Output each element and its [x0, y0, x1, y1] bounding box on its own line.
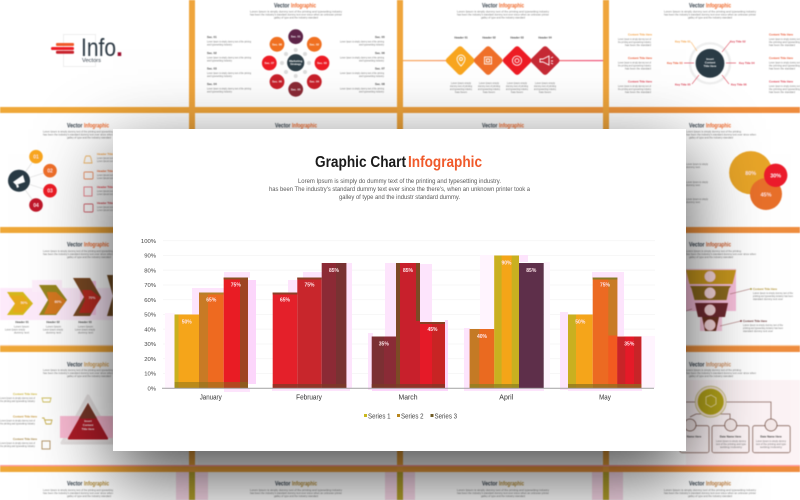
thumbnail: triangle: Lorem Ipsum is simply dummy text of	[0, 397, 35, 400]
thumbnail: diamonds: Vector	[482, 4, 498, 10]
title	[315, 154, 482, 171]
thumbnail: numbered circles: Lorem Ipsum text	[97, 206, 113, 209]
thumbnail: chevron arrows: Lorem Ipsum simply	[43, 328, 64, 332]
thumbnail: chevron arrows: Lorem Ipsum	[46, 326, 61, 328]
January bars: 75%	[231, 282, 241, 288]
thumbnail: hub diagram: the printing and typesetting industry	[618, 88, 652, 91]
thumbnail: org chart: setting industry	[760, 446, 783, 449]
month labels: March	[398, 394, 418, 402]
thumbnail: hub diagram: has been the standard	[625, 44, 652, 47]
thumbnail: diamonds: has been	[455, 91, 468, 94]
thumbnail: org chart: text of the printing and type	[756, 443, 787, 446]
thumbnail: diamonds: Header 02	[482, 36, 496, 40]
thumbnail: circular diagram: Lorem Ipsum is simply dummy text of the printing	[340, 56, 385, 60]
thumbnail: hub diagram: Vector	[689, 4, 705, 10]
thumbnail: numbered circles: Vector	[67, 124, 83, 130]
thumbnail: circular diagram: Sec. 01	[291, 35, 301, 39]
month labels: April	[499, 394, 514, 402]
title: Graphic Chart	[315, 154, 406, 171]
thumbnail: circular diagram: Lorem Ipsum is simply dummy text of the printing	[207, 40, 252, 44]
thumbnail: hub diagram: Infographic	[706, 4, 732, 10]
thumbnail: circular diagram: Sec. 03	[207, 66, 217, 70]
thumbnail: numbered circles: galley of type and the industry standard	[67, 136, 112, 140]
thumbnail: hub diagram: Lorem Ipsum is simply dummy text of	[618, 38, 651, 41]
thumbnail: circular diagram: Sec. 04	[309, 80, 320, 84]
thumbnail headings: other rows: galley of type and the industry standard	[688, 495, 733, 498]
thumbnail: numbered circles: 03	[47, 188, 53, 194]
thumbnail: diamonds: Lorem Ipsum is simply dummy text of the printing and typesetting industry	[457, 10, 550, 14]
thumbnail: chevron arrows: 50%	[20, 301, 28, 305]
title: Infographic	[408, 154, 482, 171]
thumbnail headings: other rows	[43, 124, 757, 498]
thumbnail: org chart: Vector	[689, 362, 705, 368]
subtitle paragraph	[269, 178, 530, 201]
thumbnail: funnel: standard dummy text ever	[753, 298, 783, 301]
thumbnail: funnel: Infographic	[706, 242, 732, 248]
thumbnail: logo: Info	[81, 34, 116, 62]
thumbnail: hub diagram	[618, 4, 800, 94]
thumbnail: numbered circles: has been the industry's standard dummy text ever since when	[43, 134, 114, 136]
thumbnail: diamonds: galley of type and the industry standard	[481, 16, 526, 20]
subtitle paragraph: Lorem Ipsum is simply do dummy text of the printing and typesetting industry.	[298, 178, 501, 185]
thumbnail: hub diagram: Content Title Here	[769, 56, 793, 60]
thumbnail: triangle: Insert	[84, 419, 92, 423]
thumbnail: hub diagram: has been the standard	[769, 44, 796, 47]
thumbnail: numbered circles: Lorem Ipsum text	[97, 177, 113, 180]
thumbnail: logo: Vectors	[82, 58, 102, 64]
thumbnail: circular diagram: Lorem Ipsum is simply dummy text of the printing	[340, 40, 385, 44]
thumbnail: venn circles: dummy text	[686, 184, 700, 187]
thumbnail: diamonds	[403, 4, 603, 94]
thumbnail: diamonds: and typesetting industry	[478, 88, 501, 91]
thumbnail: venn circles: dummy text	[686, 201, 700, 204]
thumbnail: funnel: Content Title Here	[743, 319, 767, 323]
thumbnail: circular diagram: Sec. 06	[272, 80, 282, 84]
thumbnail: org chart: Lorem Ipsum is simply dummy	[716, 440, 747, 443]
thumbnail: diamonds: has been the industry's standard dummy text ever since when an unknown printer	[457, 14, 549, 16]
thumbnail: circular diagram: Lorem Ipsum is simply dummy text of the printing	[340, 72, 385, 75]
thumbnail: chevron arrows	[0, 242, 114, 334]
thumbnail: triangle: galley of type and the industry standard	[67, 375, 112, 378]
thumbnail: hub diagram: Key Title 01	[675, 40, 691, 44]
thumbnail: hub diagram: the printing and typesetting	[769, 64, 800, 68]
panel: main white card	[113, 129, 686, 451]
thumbnail: diamonds: and typesetting industry	[534, 88, 557, 91]
thumbnail: diamonds: Lorem Ipsum simply	[507, 82, 528, 85]
May bars	[568, 278, 641, 388]
month labels: January	[200, 394, 222, 402]
thumbnail: diamonds: Infographic	[499, 4, 525, 10]
thumbnail: funnel: Lorem Ipsum is simply dummy text of the	[743, 324, 784, 327]
thumbnail: diamonds: has been	[511, 91, 524, 94]
thumbnail: triangle: Title Here	[82, 427, 95, 431]
thumbnail: hub diagram: Key Title 04	[739, 61, 755, 65]
March bars: 35%	[379, 342, 389, 348]
thumbnail headings: other rows: Vector	[275, 124, 291, 130]
thumbnail: circular diagram: Sec. 08	[272, 42, 282, 46]
thumbnail: venn circles: Lorem Ipsum is simply	[686, 198, 709, 201]
pink halos beside bottom bands	[176, 472, 623, 500]
April bars: 85%	[526, 268, 537, 274]
thumbnail: circular diagram: Lorem Ipsum is simply dummy text of the printing	[207, 56, 252, 60]
legend: Series 2	[401, 414, 424, 420]
bar chart	[141, 239, 655, 402]
thumbnail: diamonds: has been	[539, 91, 552, 94]
y axis labels: 40%	[144, 328, 157, 334]
thumbnail: diamonds: dummy text of printing	[478, 85, 501, 88]
thumbnail: hub diagram: Insert	[706, 57, 714, 61]
thumbnail headings: other rows: Vector	[275, 482, 291, 488]
thumbnail: funnel: galley of type and the industry standard	[689, 256, 734, 259]
y axis labels: 60%	[144, 298, 157, 304]
thumbnail: circular diagram: Marketing	[289, 59, 303, 63]
April bars: 90%	[501, 260, 512, 266]
thumbnail: org chart: has been the industry's standard dummy text ever since when	[686, 372, 757, 375]
May bars: 50%	[575, 320, 586, 326]
thumbnail: circular diagram: galley of type and the industry standard	[274, 16, 319, 20]
thumbnail: chevron arrows: dummy text	[78, 332, 93, 334]
February bars: 65%	[280, 298, 291, 304]
thumbnail: hub diagram: the printing and typesetting	[769, 41, 800, 44]
y axis labels: 0%	[147, 386, 157, 392]
thumbnail: venn circles: galley of type and the industry standard	[689, 136, 734, 140]
thumbnail: chevron arrows: has been the industry's standard dummy text ever since when	[43, 253, 114, 256]
thumbnail: numbered circles: Lorem Ipsum is simply dummy text of the printing and typesetting	[43, 130, 114, 134]
thumbnail: hub diagram: has been the standard	[769, 68, 796, 70]
thumbnail: numbered circles: Header Title	[97, 185, 113, 189]
thumbnail: numbered circles	[8, 124, 114, 212]
thumbnail: hub diagram: Content	[705, 60, 715, 64]
thumbnail: circular diagram: Sec. 08	[375, 82, 385, 86]
thumbnail: chevron arrows: dummy text	[14, 332, 29, 334]
subtitle paragraph: galley of type and the industr standard dummy.	[339, 194, 460, 201]
thumbnail: numbered circles: Infographic	[84, 124, 110, 130]
thumbnail: numbered circles: Lorem Ipsum text	[97, 190, 113, 193]
thumbnail: venn circles: 45%	[760, 192, 772, 198]
thumbnail: triangle: has been the industry's standard dummy text ever since when	[43, 372, 114, 375]
thumbnail: chevron arrows: Lorem Ipsum is simply dummy text of the printing and typesetting	[43, 250, 114, 253]
thumbnail: hub diagram: Title Here	[704, 64, 717, 68]
thumbnail: numbered circles: Lorem Ipsum text	[97, 209, 113, 212]
thumbnail: hub diagram: Content Title Here	[628, 32, 652, 36]
thumbnail: hub diagram: the printing and typesetting	[769, 88, 800, 91]
thumbnail: numbered circles: 04	[33, 203, 39, 209]
January bars: 50%	[182, 320, 192, 326]
y axis labels: 80%	[144, 268, 157, 274]
thumbnail: circular diagram: and typesetting industry	[359, 44, 385, 46]
thumbnail: triangle: Lorem Ipsum is simply dummy text of	[0, 420, 35, 422]
thumbnail: chevron arrows: Header 03	[78, 320, 92, 324]
thumbnail headings: other rows: galley of type and the industry standard	[274, 495, 319, 498]
month labels: May	[599, 394, 611, 402]
y axis labels: 30%	[144, 342, 157, 348]
thumbnail headings: other rows: Lorem Ipsum is simply dummy text of the printing and typesetting industry	[250, 489, 343, 492]
thumbnail: circular diagram: and typesetting industry	[207, 44, 233, 46]
thumbnail: hub diagram: the printing and typesetting industry	[618, 41, 652, 44]
thumbnail: venn circles: 30%	[770, 174, 781, 180]
thumbnail: numbered circles: Header Title	[97, 201, 113, 205]
thumbnail headings: other rows: Infographic	[706, 482, 732, 488]
thumbnail: chevron arrows: 60%	[54, 300, 62, 304]
grid bands between thumbnails	[0, 107, 800, 472]
thumbnail headings: other rows: Infographic	[292, 124, 318, 130]
thumbnail: venn circles: dummy text	[686, 166, 700, 169]
thumbnail: hub diagram: Key Title 05	[675, 82, 691, 86]
y axis labels	[141, 239, 157, 392]
thumbnail: diamonds: Lorem Ipsum simply	[451, 82, 472, 85]
thumbnail: triangle: Vector	[67, 362, 83, 368]
January bars	[174, 278, 248, 388]
thumbnail: hub diagram: Content Title Here	[769, 80, 793, 84]
thumbnail: chevron arrows: Lorem Ipsum simply	[75, 328, 96, 332]
February bars	[273, 263, 346, 388]
thumbnail: hub diagram: has been the standard	[769, 91, 796, 94]
thumbnail: numbered circles: Header Title	[97, 169, 113, 173]
March bars	[372, 263, 445, 388]
thumbnail: venn circles: 80%	[745, 171, 756, 177]
y axis labels: 20%	[144, 357, 157, 363]
thumbnail: hub diagram: Lorem Ipsum is simply dummy text of	[618, 62, 651, 64]
thumbnail: hub diagram: Content Title Here	[628, 56, 652, 60]
thumbnail headings: other rows: Lorem Ipsum is simply dummy text of the printing and typesetting industry	[457, 489, 550, 492]
thumbnail: numbered circles: Header Title	[97, 152, 113, 156]
thumbnail headings: other rows: Vector	[689, 482, 705, 488]
thumbnail: venn circles: has been the industry's standard dummy text ever since when	[686, 134, 757, 136]
thumbnail: triangle: Infographic	[84, 362, 110, 368]
thumbnail: circular diagram: Lorem Ipsum is simply dummy text of the printing	[207, 72, 252, 75]
thumbnail: diamonds: dummy text of printing	[534, 85, 557, 88]
thumbnail: chevron arrows: Lorem Ipsum simply	[5, 328, 26, 332]
thumbnail: hub diagram: Content Title Here	[628, 80, 652, 84]
thumbnail: triangle: the printing and typesetting industry	[0, 400, 36, 403]
thumbnail: funnel: printing and typesetting industry has been	[753, 295, 794, 298]
thumbnail: triangle: Content Title Here	[13, 392, 37, 396]
legend: Series 1	[368, 414, 391, 420]
thumbnail: numbered circles: 02	[47, 168, 53, 174]
subtitle paragraph: has been The industry's standard dummy text ever since the there's, when an unknown printer took a	[269, 186, 530, 193]
thumbnail: circular diagram: and typesetting industry	[359, 90, 385, 94]
thumbnail: numbered circles: Lorem Ipsum text	[97, 193, 113, 196]
thumbnail headings: other rows: Lorem Ipsum is simply dummy text of the printing and typesetting	[43, 489, 114, 492]
thumbnail: org chart: Date Name Here	[720, 434, 742, 438]
y axis labels: 50%	[144, 313, 157, 319]
thumbnail: org chart: Infographic	[706, 362, 732, 368]
thumbnail headings: other rows: has been the industry's standard dummy text ever since when	[43, 492, 114, 495]
thumbnail: circular diagram: Sec. 04	[207, 82, 217, 86]
thumbnail: diamonds: and typesetting industry	[506, 88, 529, 91]
thumbnail: diamonds: dummy text of printing	[506, 85, 529, 88]
thumbnail: logo: .	[116, 34, 123, 62]
thumbnail: funnel: has been the industry's standard dummy text ever since when	[686, 253, 757, 256]
thumbnail: org chart	[680, 362, 800, 465]
thumbnail headings: other rows: Vector	[67, 482, 83, 488]
thumbnail: hub diagram: Content Title Here	[769, 32, 793, 36]
y axis labels: 70%	[144, 283, 157, 289]
thumbnail: hub diagram: galley of type and the industry standard	[688, 16, 733, 20]
thumbnail headings: other rows: has been the industry's standard dummy text ever since when an unknown printer	[250, 492, 342, 495]
thumbnail: circular diagram: and typesetting industry	[207, 75, 233, 78]
thumbnail: circular diagram: Sec. 01	[207, 35, 217, 39]
y axis labels: 90%	[144, 254, 157, 260]
thumbnail: triangle	[0, 362, 114, 449]
thumbnail: chevron arrows: Infographic	[84, 242, 110, 248]
month labels: February	[296, 394, 322, 402]
thumbnail: numbered circles: 01	[33, 154, 39, 160]
thumbnail: hub diagram: Key Title 03	[667, 61, 683, 65]
thumbnail: chevron arrows: galley of type and the industry standard	[67, 256, 112, 259]
thumbnail: triangle: Content	[83, 423, 93, 427]
thumbnail: venn circles: Lorem Ipsum is simply	[686, 181, 709, 184]
thumbnail: org chart: setting industry	[720, 446, 743, 449]
April bars	[470, 256, 544, 388]
thumbnail: chevron arrows: 70%	[88, 296, 96, 300]
thumbnail: triangle: Content Title Here	[13, 414, 37, 418]
May bars: 75%	[600, 282, 611, 288]
thumbnail headings: other rows: has been the industry's standard dummy text ever since when an unknown printer	[664, 492, 756, 495]
March bars: 45%	[427, 327, 438, 333]
thumbnail: circular diagram: Sec. 02	[309, 42, 320, 46]
thumbnail: triangle: the printing and typesetting industry	[0, 422, 36, 426]
thumbnail: chevron arrows: Header 02	[46, 320, 60, 324]
February bars: 75%	[304, 282, 315, 288]
thumbnail: triangle: Lorem Ipsum is simply dummy text of	[0, 442, 35, 445]
thumbnail: circular diagram: Sec. 05	[375, 35, 385, 39]
thumbnail: triangle: Content Title Here	[13, 437, 37, 441]
y axis labels: 100%	[141, 239, 157, 245]
thumbnail: circular diagram: and typesetting industry	[207, 90, 233, 94]
thumbnail: funnel: Vector	[689, 242, 705, 248]
February bars: 85%	[329, 268, 340, 274]
thumbnail: chevron arrows: Lorem Ipsum	[14, 326, 29, 328]
thumbnail: org chart: Date Name Here	[760, 434, 782, 438]
thumbnail: diamonds: has been	[483, 91, 496, 94]
thumbnail: chevron arrows: Lorem Ipsum	[78, 326, 93, 328]
thumbnail: funnel: Content Title Here	[753, 287, 777, 291]
y axis labels: 10%	[144, 372, 157, 378]
thumbnail headings: other rows: has been the industry's standard dummy text ever since when an unknown printer	[457, 492, 549, 495]
thumbnail: venn circles	[686, 124, 787, 210]
March bars: 85%	[403, 268, 414, 274]
thumbnail: venn circles: Vector	[689, 124, 705, 130]
thumbnail: circular diagram: Vector	[274, 4, 290, 10]
thumbnail: circular diagram: Lorem Ipsum is simply dummy text of the printing	[207, 88, 252, 90]
thumbnail: org chart: Lorem Ipsum is simply dummy text of the printing	[686, 369, 742, 372]
thumbnail: logo	[51, 34, 123, 66]
thumbnail: org chart: Name Here	[687, 434, 702, 438]
thumbnail: diamonds: Header 01	[454, 36, 468, 40]
thumbnail: hub diagram: has been the standard	[625, 91, 652, 94]
thumbnail: circular diagram	[207, 4, 385, 97]
thumbnail: circular diagram: Sec. 05	[291, 87, 301, 91]
thumbnail: hub diagram: has been the standard	[625, 68, 652, 70]
thumbnail: circular diagram: and typesetting industry	[359, 60, 385, 62]
thumbnail: triangle: the printing and typesetting industry	[0, 445, 36, 448]
thumbnail: funnel	[686, 242, 794, 333]
thumbnail: circular diagram: Sec. 03	[317, 61, 327, 65]
thumbnail: numbered circles: Lorem Ipsum text	[97, 174, 113, 177]
thumbnail: triangle: Lorem Ipsum is simply dummy text of the printing and typesetting	[43, 369, 114, 372]
thumbnail headings: other rows: Infographic	[84, 482, 110, 488]
thumbnail: diamonds: dummy text of printing	[450, 85, 473, 88]
thumbnail: chevron arrows: Header 01	[15, 320, 29, 324]
May bars: 35%	[624, 342, 635, 348]
thumbnail: funnel: Lorem Ipsum is simply dummy text of the printing	[686, 250, 742, 253]
thumbnail: diamonds: Lorem Ipsum simply	[535, 82, 556, 85]
month labels	[200, 394, 611, 402]
thumbnail: diamonds: and typesetting industry	[450, 88, 473, 91]
thumbnail: circular diagram: Lorem Ipsum is simply dummy text of the printing and typesetting industry	[250, 10, 343, 14]
thumbnail: hub diagram: has been the industry's standard dummy text ever since when an unknown printer	[664, 14, 756, 16]
thumbnail: circular diagram: Sec. 07	[264, 61, 275, 65]
thumbnail: circular diagram: Sec. 06	[375, 51, 385, 55]
thumbnail: circular diagram: and typesetting industry	[359, 75, 385, 78]
thumbnail: funnel: printing and typesetting industry has been	[743, 327, 784, 330]
thumbnail: circular diagram: Infographic	[291, 4, 317, 10]
thumbnail: venn circles: Lorem Ipsum is simply	[686, 163, 709, 166]
thumbnail headings: other rows: Infographic	[499, 482, 525, 488]
thumbnail: chevron arrows: Vector	[67, 242, 83, 248]
thumbnail: circular diagram: Lorem Ipsum is simply dummy text of the printing	[340, 88, 385, 90]
thumbnail: venn circles: Infographic	[706, 124, 732, 130]
thumbnail headings: other rows: galley of type and the industry standard	[67, 495, 112, 498]
thumbnail: diamonds: Header 04	[538, 36, 552, 40]
thumbnail: chevron arrows: dummy text	[46, 332, 61, 334]
thumbnail: numbered circles: Lorem Ipsum text	[97, 160, 113, 163]
January bars: 65%	[206, 298, 217, 304]
thumbnail: hub diagram: Lorem Ipsum is simply dummy text of the printing and typesetting industry	[664, 10, 757, 14]
thumbnail: hub diagram: Lorem Ipsum is simply dummy text of	[618, 85, 651, 88]
legend	[364, 414, 457, 420]
thumbnail: numbered circles: Lorem Ipsum text	[97, 157, 113, 160]
thumbnail: org chart: galley of type and the industry standard	[689, 375, 734, 378]
thumbnail: circular diagram: Sec. 07	[375, 66, 385, 70]
thumbnail: funnel: Lorem Ipsum is simply dummy text of the	[753, 292, 794, 295]
thumbnail: diamonds: Lorem Ipsum simply	[479, 82, 500, 85]
thumbnail: hub diagram: Key Title 06	[731, 82, 747, 86]
thumbnail headings: other rows: Vector	[482, 124, 498, 130]
legend: Series 3	[434, 414, 457, 420]
thumbnail headings: other rows: Infographic	[499, 124, 525, 130]
thumbnail: circular diagram: and typesetting industry	[207, 60, 233, 62]
thumbnail: org chart: Lorem Ipsum is simply dummy	[756, 440, 787, 443]
thumbnail: funnel: standard dummy text ever	[743, 330, 773, 333]
thumbnail: circular diagram: Strategy	[290, 62, 302, 66]
April bars: 40%	[477, 334, 488, 340]
thumbnail: org chart: text of the printing and type	[716, 443, 747, 446]
thumbnail: circular diagram: Sec. 02	[207, 51, 217, 55]
thumbnail: hub diagram: the printing and typesetting industry	[618, 64, 652, 68]
thumbnail headings: other rows: Infographic	[292, 482, 318, 488]
thumbnail headings: other rows: Vector	[482, 482, 498, 488]
thumbnail: circular diagram: has been the industry's standard dummy text ever since when an unknown printer	[250, 14, 342, 16]
thumbnail headings: other rows: galley of type and the industry standard	[481, 495, 526, 498]
thumbnail: diamonds: Header 03	[510, 36, 524, 40]
thumbnail: venn circles: Lorem Ipsum is simply dummy text of the printing	[686, 130, 742, 134]
thumbnail headings: other rows: Lorem Ipsum is simply dummy text of the printing and typesetting industry	[664, 489, 757, 492]
thumbnail: hub diagram: Key Title 02	[730, 40, 746, 44]
